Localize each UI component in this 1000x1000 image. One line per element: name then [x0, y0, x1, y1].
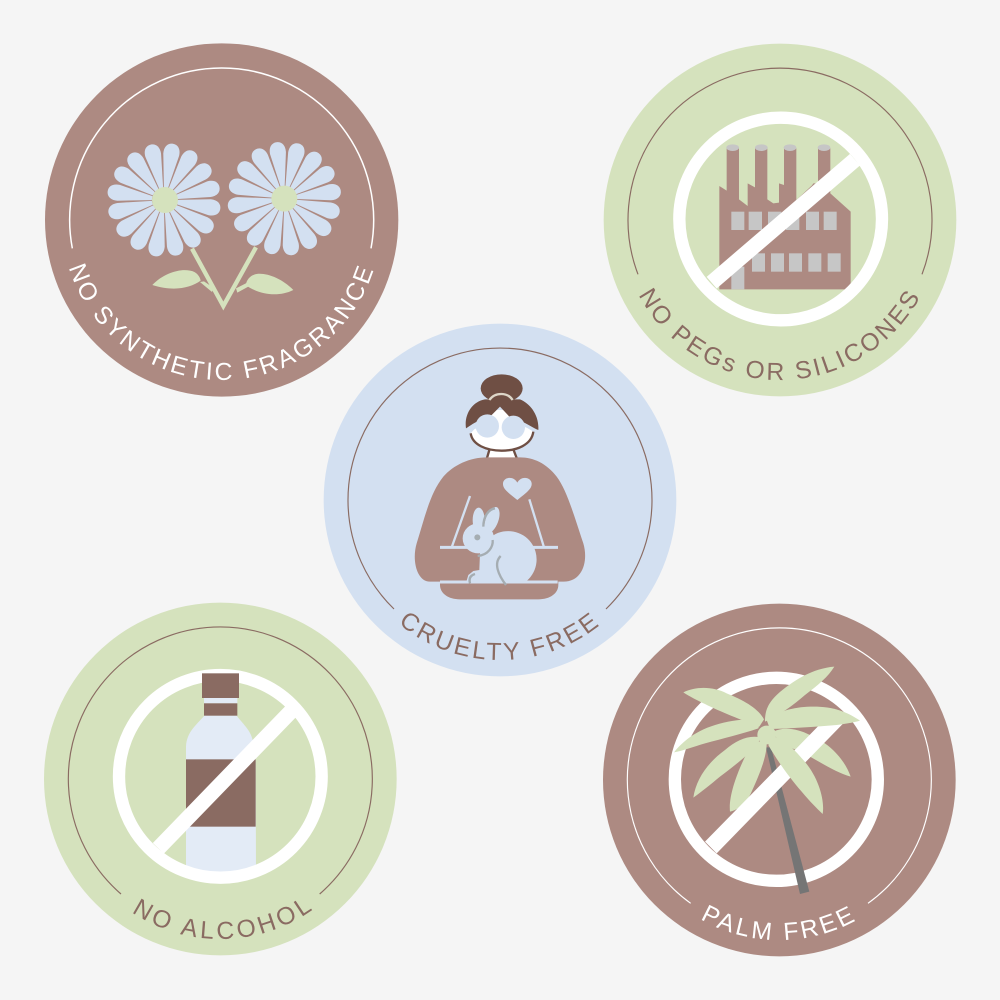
badge: palm free	[603, 604, 956, 956]
icon: left daisy	[105, 141, 223, 259]
icon: stems and leaves	[152, 247, 293, 306]
inner ring arc	[627, 628, 931, 903]
prohibition sign	[119, 675, 322, 878]
icon: rabbit	[463, 505, 537, 585]
badge disc	[44, 603, 397, 955]
curved label: PALM FREE	[702, 904, 855, 940]
icon: right daisy	[227, 141, 342, 256]
curved label: NO SYNTHETIC FRAGRANCE	[69, 263, 374, 380]
badge: no synthetic fragrance	[45, 43, 398, 397]
curved label: CRUELTY FREE	[402, 612, 599, 660]
icon: factory	[719, 144, 851, 289]
icon: bottle cap	[202, 673, 239, 716]
badge disc	[604, 44, 956, 396]
icon: palm trunk	[766, 747, 809, 894]
badge disc	[324, 324, 676, 676]
icon: woman with glasses	[466, 374, 538, 458]
prohibition slash	[705, 723, 844, 853]
curved label: NO ALCOHOL	[133, 898, 312, 940]
badge: no PEGs or silicones	[604, 44, 956, 396]
icon: bottle body	[186, 716, 256, 873]
inner ring arc	[70, 68, 374, 248]
icon: back fronds	[730, 729, 851, 812]
prohibition sign	[679, 118, 882, 320]
inner ring arc	[68, 627, 372, 894]
inner ring arc	[628, 68, 932, 274]
inner ring arc	[348, 348, 652, 609]
badge: no alcohol	[44, 602, 397, 956]
icon: front fronds	[674, 667, 860, 814]
prohibition ring	[675, 678, 878, 881]
icon: heart	[503, 478, 532, 500]
curved label: NO PEGs OR SILICONES	[639, 288, 918, 380]
badge disc	[45, 43, 398, 397]
badge: cruelty free	[324, 324, 676, 676]
icon: bottle label	[186, 759, 256, 827]
badge disc	[603, 604, 956, 956]
icon: sweater and basket	[415, 457, 585, 599]
icon: cage lines	[440, 496, 558, 582]
